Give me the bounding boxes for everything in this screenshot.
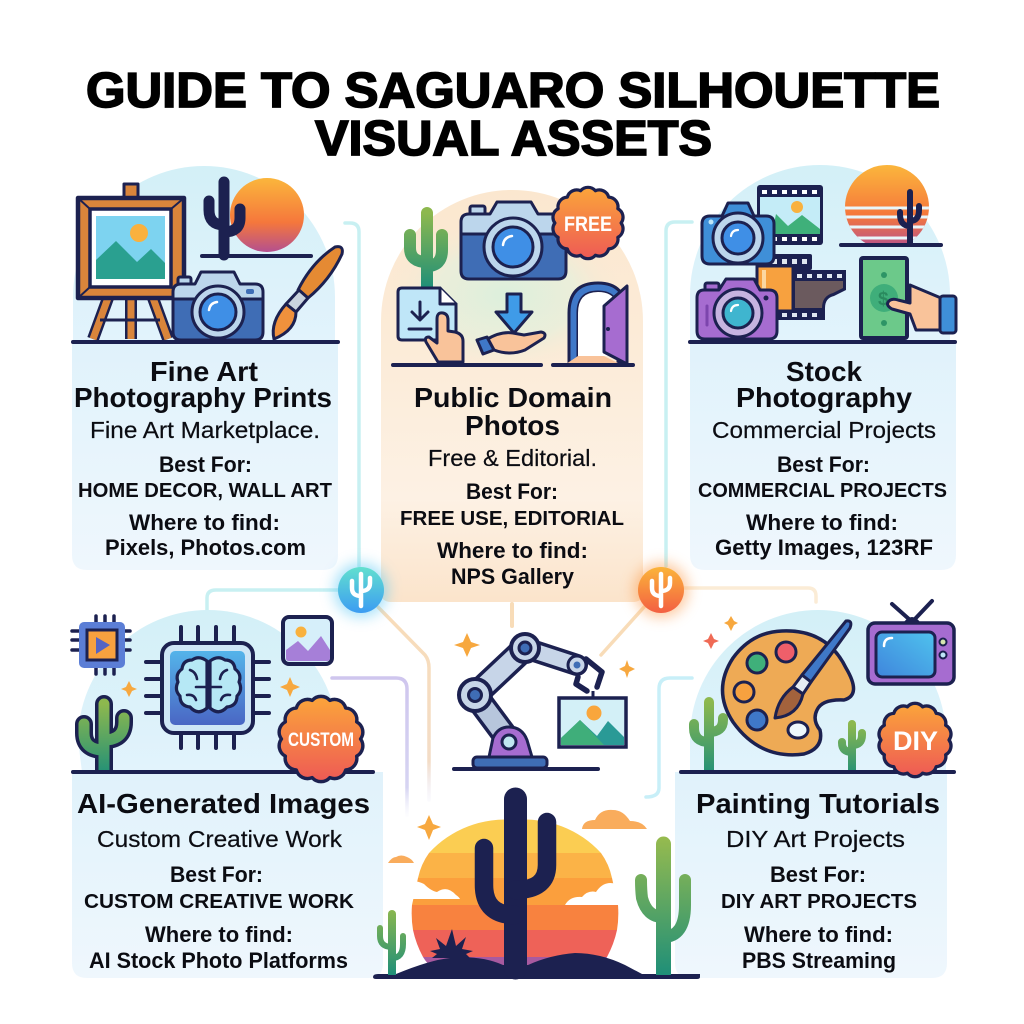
panel text: Public Domain bbox=[414, 382, 612, 413]
panel text: PBS Streaming bbox=[742, 948, 896, 973]
title bbox=[86, 64, 940, 166]
panel text: FREE USE, EDITORIAL bbox=[400, 508, 624, 530]
panel text: AI Stock Photo Platforms bbox=[89, 948, 348, 973]
dome background bbox=[78, 610, 338, 772]
panel text: Getty Images, 123RF bbox=[715, 535, 933, 560]
panel: painting tutorials bbox=[675, 601, 954, 978]
text card bbox=[690, 342, 956, 570]
icon: camera bbox=[173, 272, 263, 340]
icon: robot arm with picture bbox=[454, 633, 635, 769]
panel text: DIY Art Projects bbox=[726, 826, 905, 852]
panel text: DIY ART PROJECTS bbox=[721, 891, 917, 913]
panel text: Best For: bbox=[466, 479, 558, 504]
gripper bbox=[576, 659, 602, 691]
dome background bbox=[73, 166, 335, 342]
panel text: Where to find: bbox=[746, 510, 898, 535]
panel text: Where to find: bbox=[744, 922, 893, 947]
panel: fine art photography prints bbox=[72, 166, 342, 570]
panel text: Best For: bbox=[770, 862, 866, 887]
icon: open door bbox=[566, 283, 627, 364]
panel text: Photos bbox=[465, 410, 560, 441]
badge: free: FREE bbox=[564, 213, 612, 236]
agave bbox=[430, 929, 473, 958]
panel text: NPS Gallery bbox=[451, 564, 575, 589]
panel text: Commercial Projects bbox=[712, 417, 936, 443]
panel text: AI-Generated Images bbox=[77, 788, 370, 819]
base bbox=[489, 727, 532, 757]
panel: stock photography bbox=[690, 165, 956, 570]
panel text bbox=[400, 382, 624, 589]
badge: custom: CUSTOM bbox=[288, 730, 354, 751]
icon: palette and brush bbox=[722, 621, 854, 755]
icon: purple camera bbox=[697, 279, 777, 339]
title: GUIDE TO SAGUARO SILHOUETTE bbox=[86, 64, 940, 118]
panel text: Where to find: bbox=[129, 510, 280, 535]
dome background bbox=[690, 610, 946, 772]
panel text bbox=[74, 356, 332, 560]
badge: diy bbox=[879, 703, 951, 777]
node: orange cactus bbox=[634, 563, 688, 617]
green cacti bbox=[380, 844, 685, 985]
sparkles bbox=[454, 633, 635, 678]
badge: diy: DIY bbox=[893, 726, 938, 756]
badge: free bbox=[553, 187, 623, 259]
icon: blue camera bbox=[702, 203, 774, 264]
sun bands bbox=[412, 820, 618, 976]
saguaro silhouette bbox=[484, 799, 547, 968]
shelf lines bbox=[393, 363, 633, 367]
panel text: COMMERCIAL PROJECTS bbox=[698, 480, 947, 502]
title: VISUAL ASSETS bbox=[315, 112, 712, 166]
icon: banknote bbox=[859, 256, 909, 340]
panel text: Fine Art bbox=[150, 356, 258, 387]
panel text: CUSTOM CREATIVE WORK bbox=[84, 891, 355, 913]
panel text: Best For: bbox=[159, 452, 252, 477]
icon: small video chip bbox=[72, 616, 130, 674]
node: blue cactus bbox=[334, 563, 388, 617]
icon: sparkles bbox=[703, 616, 738, 649]
icon: tv bbox=[868, 601, 954, 684]
icon: film rolls bbox=[756, 254, 846, 320]
badge: custom bbox=[279, 696, 363, 782]
icon: hand holding cash bbox=[888, 285, 956, 333]
icon: easel bbox=[78, 184, 184, 339]
panel text: Pixels, Photos.com bbox=[105, 535, 306, 560]
arm segments bbox=[475, 648, 577, 738]
panel text: Where to find: bbox=[145, 922, 293, 947]
icon: paint brush bbox=[273, 247, 342, 339]
icon: arrow into hand bbox=[477, 294, 545, 354]
panel: ai-generated images bbox=[72, 610, 383, 978]
icon: sun and cactus bbox=[202, 178, 311, 256]
white clouds over sun bbox=[402, 881, 622, 905]
panel: public domain photos bbox=[381, 187, 643, 602]
icon: film frame bbox=[757, 185, 823, 245]
arch background bbox=[381, 190, 643, 602]
shelf line bbox=[681, 770, 954, 774]
clouds and sparkle bbox=[388, 810, 647, 863]
icon: download file with hand bbox=[398, 288, 463, 362]
panel text: Free & Editorial. bbox=[428, 445, 597, 471]
icon: brain chip bbox=[146, 627, 269, 748]
shelf line bbox=[454, 767, 598, 771]
panel text: HOME DECOR, WALL ART bbox=[78, 480, 332, 502]
icon: camera bbox=[461, 202, 566, 279]
icon: sparkles bbox=[121, 677, 300, 697]
panel text: Fine Art Marketplace. bbox=[90, 417, 320, 443]
icon: banknote: $ bbox=[878, 289, 889, 310]
panel text bbox=[698, 356, 947, 560]
icon: big saguaro sunset bbox=[373, 799, 700, 985]
panel text bbox=[77, 788, 370, 973]
panel text: Stock bbox=[786, 356, 863, 387]
hill and ground bbox=[373, 953, 700, 979]
text card bbox=[72, 342, 338, 570]
panel text: Photography bbox=[736, 382, 913, 413]
connector lines bbox=[207, 222, 816, 815]
panel text: Painting Tutorials bbox=[696, 788, 940, 819]
icon: green cacti bbox=[694, 702, 862, 776]
text card bbox=[72, 772, 383, 978]
panel text: Custom Creative Work bbox=[97, 826, 343, 852]
icon: green cactus bbox=[410, 213, 442, 288]
shelf line bbox=[73, 770, 373, 774]
joints bbox=[459, 679, 491, 711]
icon: picture bbox=[283, 617, 332, 664]
panel text: Photography Prints bbox=[74, 382, 332, 413]
shelf line bbox=[73, 340, 338, 344]
panel text: Best For: bbox=[170, 862, 263, 887]
icon: sunset with cactus bbox=[840, 165, 941, 249]
shelf line bbox=[690, 340, 955, 344]
panel text bbox=[696, 788, 940, 973]
dome background bbox=[690, 165, 950, 342]
icon: green cactus with outline bbox=[84, 704, 124, 776]
panel text: Where to find: bbox=[437, 538, 588, 563]
text card bbox=[675, 772, 947, 978]
panel text: Best For: bbox=[777, 452, 870, 477]
picture held bbox=[559, 691, 626, 747]
